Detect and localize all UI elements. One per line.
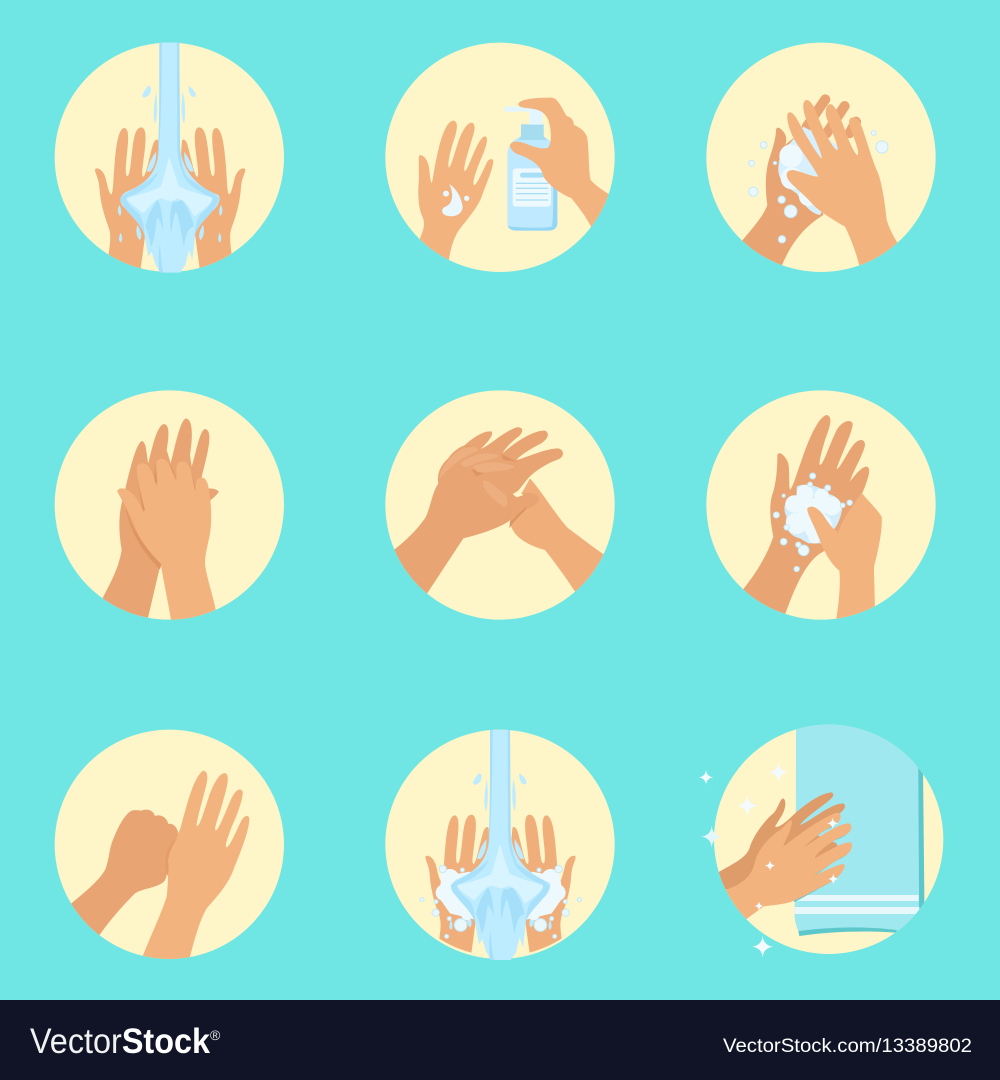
cream circle bbox=[55, 730, 284, 959]
sparkles bbox=[699, 762, 839, 957]
hand pressing pump bbox=[510, 98, 613, 230]
hands bbox=[715, 792, 852, 922]
footer bar bbox=[0, 1000, 1000, 1080]
panel: step 2 apply soap bbox=[385, 43, 615, 272]
back hand bbox=[740, 99, 856, 268]
hands bbox=[425, 815, 576, 961]
cream circle bbox=[385, 730, 615, 959]
front hand bbox=[787, 100, 900, 268]
cream circle bbox=[385, 390, 615, 620]
front hand bbox=[117, 459, 218, 623]
panel: step 7 fist on palm bbox=[55, 730, 284, 963]
cream circle bbox=[706, 43, 936, 272]
open hand bbox=[740, 415, 869, 620]
towel bbox=[794, 722, 925, 948]
upper hand bbox=[392, 427, 563, 597]
cream circle bbox=[55, 390, 284, 620]
registered mark: ® bbox=[210, 1027, 221, 1043]
panel: step 3 palm to palm bbox=[706, 43, 936, 272]
left foam bbox=[420, 865, 477, 938]
soap foam bbox=[749, 127, 888, 243]
cream circle bbox=[706, 390, 936, 620]
cream circle bbox=[714, 725, 943, 954]
image id: VectorStock.com/13389802 bbox=[723, 1035, 972, 1057]
panel: step 4 palm over back bbox=[55, 390, 284, 623]
open hand bbox=[140, 771, 249, 963]
open hand bbox=[417, 121, 493, 263]
logo wordmark: VectorStock bbox=[30, 1022, 210, 1061]
hands bbox=[95, 127, 245, 273]
rear hand bbox=[100, 418, 219, 623]
supporting hand bbox=[807, 493, 882, 623]
panel: step 8 rinse bbox=[385, 730, 615, 961]
panel: step 6 rotate in palm bbox=[706, 390, 936, 623]
water stream bbox=[120, 43, 220, 273]
panel: step 5 fingers interlaced bbox=[385, 390, 615, 620]
panel: step 1 wet hands bbox=[55, 43, 284, 273]
soap foam bbox=[773, 473, 852, 572]
water stream bbox=[451, 730, 550, 960]
right foam bbox=[525, 865, 581, 938]
panel: step 9 dry with towel bbox=[699, 722, 943, 957]
soap dispenser bbox=[504, 107, 557, 231]
fist bbox=[68, 810, 178, 937]
cream circle bbox=[385, 43, 615, 272]
soap blob bbox=[442, 184, 469, 216]
cream circle bbox=[55, 43, 284, 272]
lower hand bbox=[510, 478, 604, 592]
